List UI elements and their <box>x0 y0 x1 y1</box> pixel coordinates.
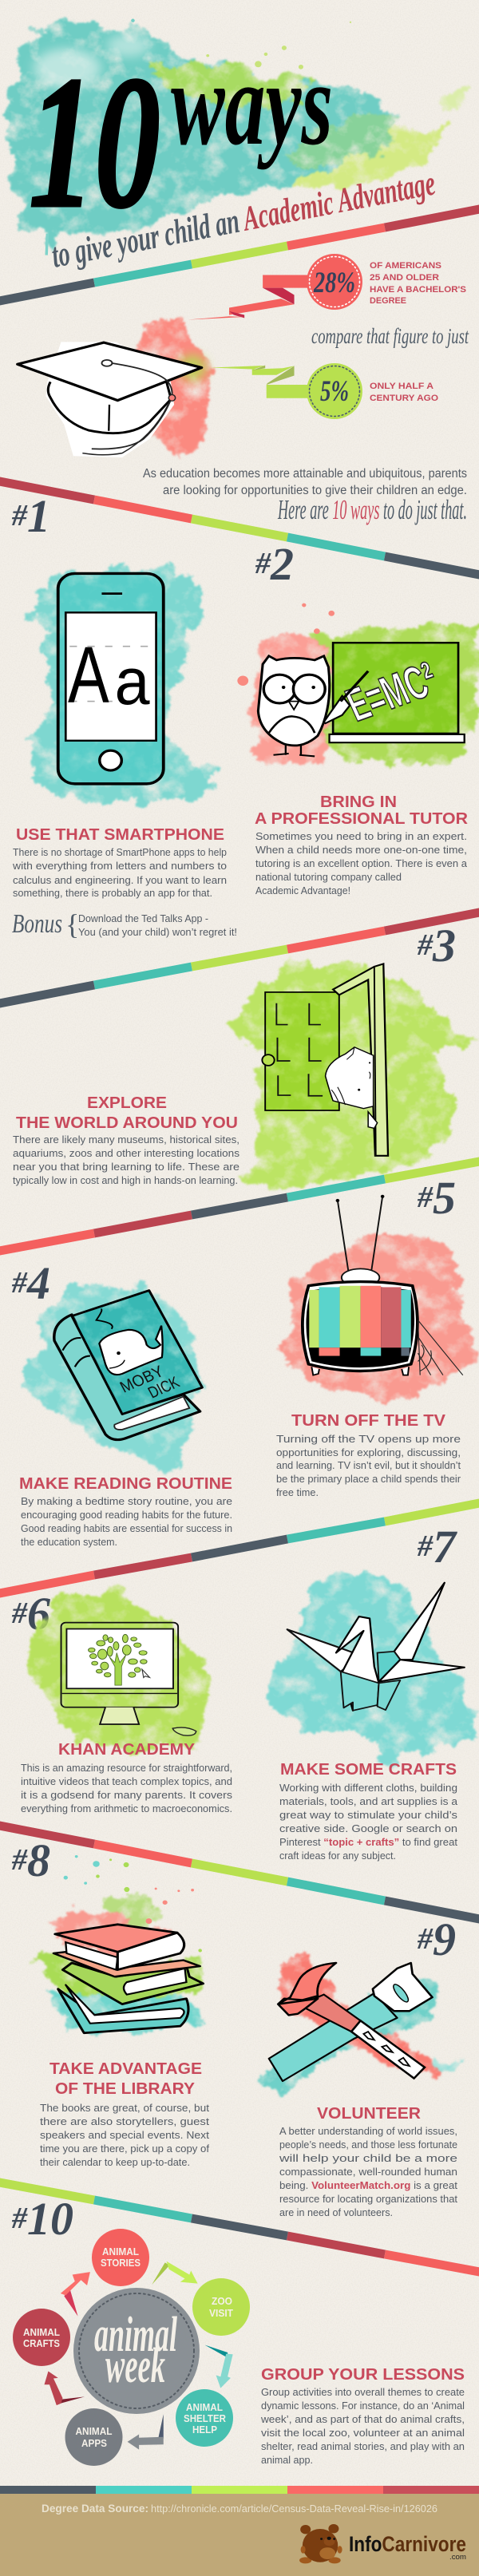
body text: visit the local zoo, volunteer at an animal <box>261 2427 465 2439</box>
circle: animal apps <box>65 2408 123 2466</box>
body text <box>21 1762 232 1814</box>
body text: there are also storytellers, guest <box>40 2115 209 2127</box>
circle: animal shelter help: ANIMAL <box>186 2402 223 2413</box>
stat label: 28% <box>370 261 466 306</box>
circle: animal shelter help <box>176 2389 233 2447</box>
body text: with everything from letters and numbers to <box>12 860 227 872</box>
body text: people’s needs, and those less fortunate <box>279 2139 457 2151</box>
body text: calculus and engineering. If you want to learn <box>13 874 227 886</box>
body text: free time. <box>276 1486 319 1498</box>
body text: opportunities for exploring, discussing, <box>276 1446 461 1458</box>
body text: national tutoring company called <box>255 871 402 883</box>
body text: Working with different cloths, building <box>279 1782 457 1794</box>
intro text: As education becomes more attainable and ubiquitous, parents <box>143 467 467 481</box>
body text: Good reading habits are essential for success in <box>21 1522 232 1534</box>
body text: time you are there, pick up a copy of <box>40 2143 209 2155</box>
stat label: 28%: HAVE A BACHELOR'S <box>370 285 466 295</box>
circle: animal shelter help: HELP <box>192 2424 217 2436</box>
bonus note: Download the Ted Talks App - <box>78 912 208 924</box>
body text: the education system. <box>21 1536 117 1548</box>
body text: something, there is probably an app for that. <box>13 887 212 899</box>
panel: tip 10 animal week <box>11 2193 465 2466</box>
body text: resource for locating organizations that <box>279 2193 457 2205</box>
bonus note: You (and your child) won’t regret it! <box>78 926 237 938</box>
body text: be the primary place a child spends their <box>276 1473 461 1485</box>
watercolor splash: title <box>0 19 473 255</box>
circle: animal crafts: CRAFTS <box>23 2338 60 2349</box>
heading: BRING IN <box>320 793 397 811</box>
body text: tutoring is an excellent option. There is even a <box>255 857 468 869</box>
logo: wordmark: .com <box>449 2553 466 2561</box>
panel: footer <box>0 2486 479 2576</box>
body text: Academic Advantage! <box>255 884 350 896</box>
number 6: 6 <box>27 1588 50 1640</box>
icon: Moby Dick book: DICK <box>145 1374 183 1402</box>
number 3: # <box>418 928 433 962</box>
heading: EXPLORE <box>87 1094 167 1112</box>
number 3: 3 <box>432 920 456 971</box>
icon: television <box>284 1195 477 1404</box>
body text <box>279 2125 457 2218</box>
circle: animal apps: ANIMAL <box>75 2426 113 2437</box>
body text: week’, and as part of that do animal crafts, <box>260 2413 465 2425</box>
panel: tip 4 reading <box>11 1257 232 1548</box>
panel: tip 2 tutor <box>237 538 479 896</box>
number 8: 8 <box>27 1834 50 1886</box>
icon: smartphone: a <box>115 644 150 718</box>
number 5: # <box>418 1181 433 1214</box>
body text: typically low in cost and high in hands-on learning. <box>13 1174 238 1186</box>
stat: 28%: 28% <box>313 267 355 299</box>
ribbon connector: green <box>211 366 309 398</box>
circle: zoo visit: VISIT <box>209 2308 233 2319</box>
panel: tip 5 tv <box>276 1172 477 1498</box>
panel: tip 1 smartphone <box>11 490 237 940</box>
body text <box>40 2102 209 2168</box>
footer background <box>0 2493 479 2576</box>
body text: Pinterest “topic + crafts” to find great <box>279 1836 457 1848</box>
icon: computer with tree <box>27 1589 214 1747</box>
circle: animal shelter help: SHELTER <box>184 2413 226 2424</box>
icon: stack of books <box>34 1855 203 2035</box>
body text <box>260 2386 465 2466</box>
circle: animal crafts: ANIMAL <box>23 2327 60 2338</box>
number 4: 4 <box>26 1257 50 1309</box>
number 2: 2 <box>270 538 294 590</box>
cycle arrows <box>44 2261 233 2450</box>
body text: By making a bedtime story routine, you are <box>21 1495 232 1507</box>
body text: There are likely many museums, historical sites, <box>13 1134 240 1146</box>
body text: creative side. Google or search on <box>279 1822 457 1834</box>
circle: zoo visit: ZOO <box>212 2296 232 2307</box>
logo: bear icon <box>299 2524 342 2563</box>
body text: The books are great, of course, but <box>40 2102 209 2114</box>
center circle: animal week: week <box>105 2339 165 2393</box>
title: 10 ways: ways <box>171 38 333 170</box>
stat: 28% <box>307 254 362 310</box>
data source: Degree Data Source: <box>42 2502 148 2515</box>
panel: tip 8 library <box>11 1834 209 2168</box>
logo: wordmark: InfoCarnivore <box>349 2532 466 2556</box>
body text: materials, tools, and art supplies is a <box>279 1795 458 1807</box>
number 2: # <box>255 547 271 580</box>
body text <box>12 846 227 899</box>
number 5: 5 <box>433 1172 456 1224</box>
heading: TURN OFF THE TV <box>291 1412 446 1430</box>
number 10: # <box>12 2202 27 2235</box>
body text: Turning off the TV opens up more <box>276 1433 461 1445</box>
body text: A better understanding of world issues, <box>279 2125 457 2137</box>
body text: speakers and special events. Next <box>40 2129 209 2141</box>
body text: their calendar to keep up-to-date. <box>40 2156 190 2168</box>
body text: Sometimes you need to bring in an expert. <box>255 830 467 842</box>
body text: Group activities into overall themes to create <box>261 2386 465 2398</box>
body text: When a child needs more one-on-one time, <box>255 844 467 856</box>
panel: tip 3 explore <box>13 920 473 1192</box>
body text: There is no shortage of SmartPhone apps to help <box>13 846 227 858</box>
heading: MAKE READING ROUTINE <box>19 1475 232 1493</box>
panel: header <box>0 19 473 525</box>
graduation cap illustration <box>18 314 211 457</box>
circle: animal stories <box>92 2229 149 2286</box>
circle: animal crafts <box>13 2309 70 2366</box>
body text: This is an amazing resource for straightforward, <box>21 1762 232 1774</box>
number 8: # <box>12 1843 27 1877</box>
heading: A PROFESSIONAL TUTOR <box>255 810 469 828</box>
icon: child at door <box>232 964 473 1192</box>
stat label: 28%: DEGREE <box>370 296 406 306</box>
stat: 5%: 5% <box>320 375 349 408</box>
panel: tip 9 volunteer <box>263 1913 461 2218</box>
bonus note: Bonus <box>12 909 62 939</box>
heading <box>255 793 469 828</box>
panel: tip 6 khan academy <box>11 1588 232 1814</box>
body text <box>255 830 468 896</box>
intro text <box>143 467 467 497</box>
icon: hammer and saw <box>263 1952 461 2098</box>
circle: animal stories: STORIES <box>101 2257 141 2269</box>
heading: USE THAT SMARTPHONE <box>16 826 224 844</box>
ribbon connector: coral <box>188 275 309 320</box>
heading: THE WORLD AROUND YOU <box>16 1114 238 1132</box>
stat label: 5% <box>370 382 438 403</box>
number 9: # <box>418 1922 433 1956</box>
number 6: # <box>12 1597 27 1630</box>
number 1: 1 <box>27 490 50 542</box>
stat label: 5%: ONLY HALF A <box>370 382 433 391</box>
intro text: are looking for opportunities to give their children an edge. <box>163 484 467 497</box>
number 10: 10 <box>27 2193 73 2245</box>
circle: animal stories: ANIMAL <box>102 2246 139 2257</box>
body text: encouraging good reading habits for the future. <box>21 1509 232 1521</box>
body text <box>276 1433 461 1498</box>
data source: http://chronicle.com/article/Census-Data-Reveal-Rise-in/126026 <box>151 2503 437 2515</box>
body text: dynamic lessons. For instance, do an ‘Animal <box>261 2400 465 2412</box>
number 1: # <box>12 499 27 532</box>
heading: OF THE LIBRARY <box>55 2080 196 2098</box>
body text: intuitive videos that teach complex topics, and <box>21 1775 232 1787</box>
heading: KHAN ACADEMY <box>58 1741 196 1759</box>
heading: MAKE SOME CRAFTS <box>280 1761 457 1779</box>
body text: compassionate, well-rounded human <box>279 2166 457 2178</box>
body text: are in need of volunteers. <box>279 2206 393 2218</box>
stat label: 28%: OF AMERICANS <box>370 261 441 271</box>
body text: will help your child be a more <box>279 2152 457 2164</box>
icon: Moby Dick book: MOBY <box>117 1363 167 1396</box>
body text: aquariums, zoos and other interesting locations <box>13 1147 240 1159</box>
body text: animal app. <box>261 2454 313 2466</box>
body text: it is a godsend for many parents. It covers <box>21 1789 232 1801</box>
circle: animal apps: APPS <box>81 2438 107 2449</box>
stat label: 5%: CENTURY AGO <box>370 394 438 403</box>
footer colour band <box>0 2486 479 2494</box>
body text: and learning. TV isn’t evil, but it shouldn’t <box>276 1459 461 1471</box>
title: 10 ways <box>29 38 333 247</box>
title: 10 ways: 10 <box>29 38 160 247</box>
number 4: # <box>12 1266 27 1300</box>
body text: everything from arithmetic to macroeconomics. <box>21 1802 232 1814</box>
body text: being. VolunteerMatch.org is a great <box>279 2179 457 2191</box>
panel: tip 7 crafts <box>266 1521 477 1862</box>
stat label: 28%: 25 AND OLDER <box>370 273 439 283</box>
heading: TAKE ADVANTAGE <box>49 2060 202 2078</box>
circle: zoo visit <box>192 2278 250 2336</box>
stat: 5% <box>307 363 362 419</box>
number 7: 7 <box>433 1521 457 1573</box>
body text <box>21 1495 232 1548</box>
bonus note: { <box>65 908 79 940</box>
center circle: animal week <box>73 2288 200 2414</box>
icon: origami crane <box>266 1568 477 1767</box>
center circle: animal week: animal <box>94 2308 177 2362</box>
icon: smartphone: A <box>68 631 109 719</box>
body text: craft ideas for any subject. <box>279 1850 396 1862</box>
data source <box>42 2502 437 2515</box>
icon: smartphone <box>29 568 223 801</box>
heading <box>16 1094 238 1132</box>
heading: VOLUNTEER <box>317 2105 422 2123</box>
body text: great way to stimulate your child’s <box>279 1809 457 1821</box>
icon: Moby Dick book <box>18 1282 202 1474</box>
bonus note <box>12 908 237 940</box>
number 7: # <box>418 1529 433 1563</box>
heading <box>49 2060 202 2098</box>
icon: owl at chalkboard <box>237 603 479 766</box>
heading: GROUP YOUR LESSONS <box>261 2366 465 2384</box>
body text <box>13 1134 240 1186</box>
body text <box>279 1782 458 1862</box>
body text: shelter, read animal stories, and play with an <box>261 2440 465 2452</box>
number 9: 9 <box>433 1913 456 1965</box>
body text: near you that bring learning to life. These are <box>13 1161 240 1173</box>
